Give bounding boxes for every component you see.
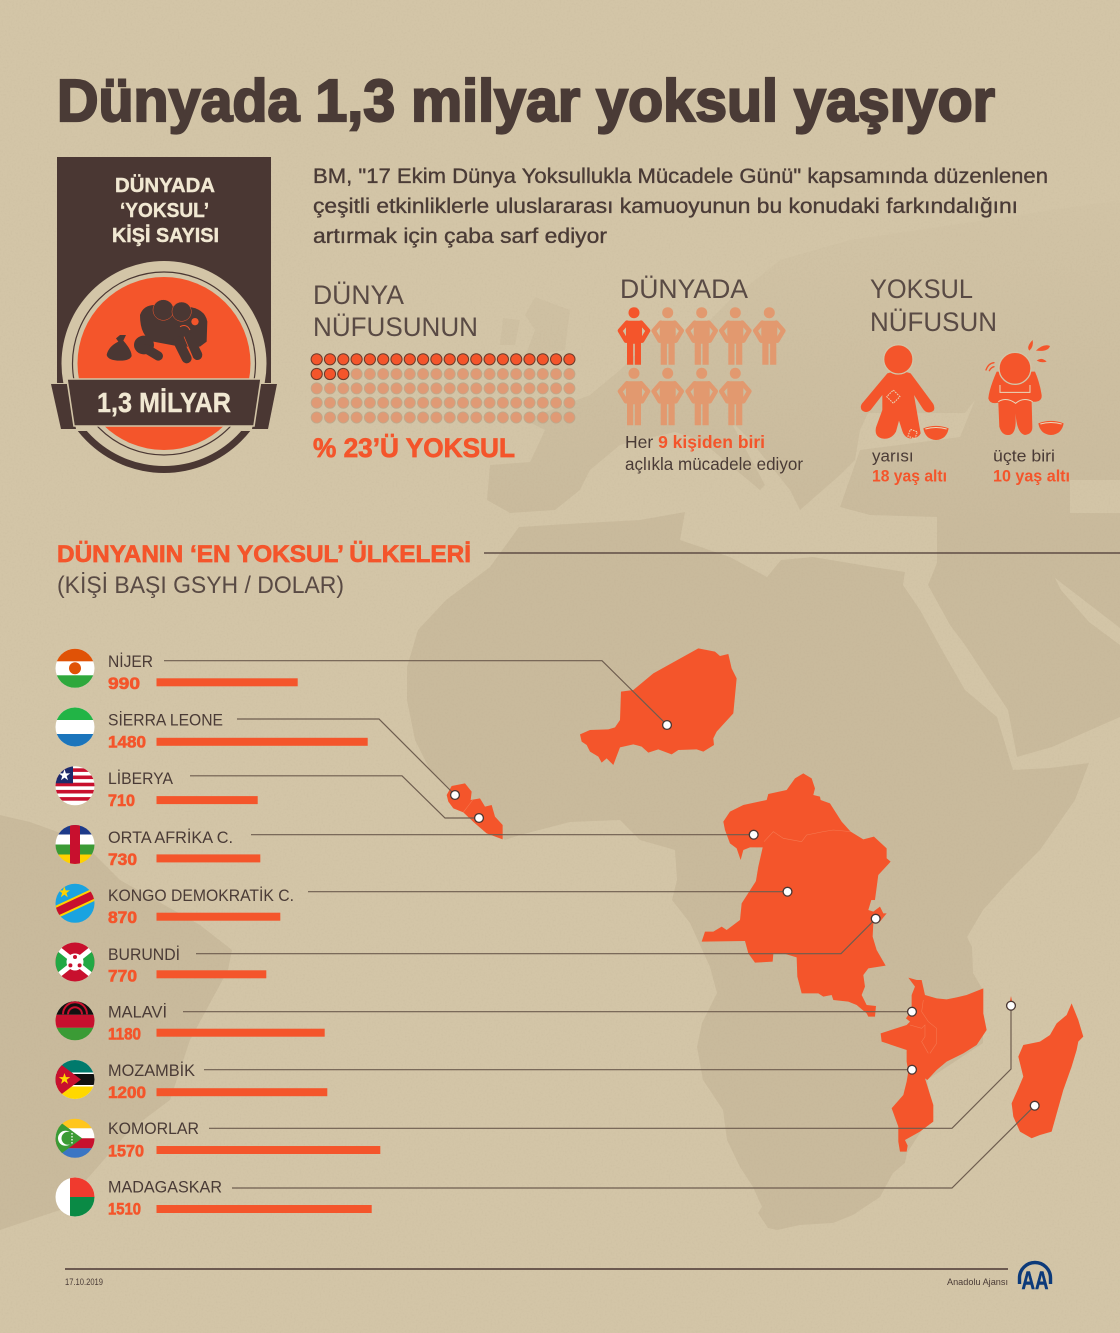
intro paragraph: artırmak için çaba sarf ediyor: [313, 225, 607, 248]
row: Madagaskar: [55, 1177, 372, 1218]
row: Sierra Leone: SİERRA LEONE: [108, 710, 223, 730]
country: Niger: [580, 648, 737, 765]
footer: 17.10.2019: [65, 1277, 103, 1287]
row: Orta Afrika C.: [55, 824, 260, 869]
row: Malavi: 1180: [108, 1024, 141, 1044]
row: Burundi: [55, 942, 266, 986]
ribbon: 1,3 milyar: 1,3 MİLYAR: [97, 387, 231, 418]
country: Madagascar: [1012, 1003, 1083, 1138]
intro paragraph: [313, 165, 1048, 248]
row: Liberya: LİBERYA: [108, 769, 174, 788]
row: Kongo Demokratik C.: 870: [108, 908, 137, 927]
title: Dünyada 1,3 milyar yoksul yaşıyor: [57, 68, 995, 134]
country: Malawi and Mozambique: [881, 978, 987, 1152]
footer: Anadolu Ajansı: [947, 1277, 1008, 1288]
row: Nijer: NİJER: [108, 652, 153, 671]
row: Mozambik: MOZAMBİK: [108, 1061, 196, 1080]
icon: child with patches and bowl: [861, 345, 949, 440]
row: Madagaskar: MADAGASKAR: [108, 1178, 222, 1197]
flag: Burundi: [55, 942, 95, 982]
heading: yoksul nüfusun: NÜFUSUN: [870, 307, 997, 337]
country: Central African Republic: [723, 773, 851, 860]
badge heading: ‘YOKSUL’: [120, 200, 209, 222]
flag: Mozambique: [55, 1060, 95, 1100]
row: Burundi: 770: [108, 966, 137, 986]
row: Nijer: 990: [108, 674, 140, 693]
heading: dünya nüfusunun: [313, 280, 478, 342]
icon: Anadolu Agency logo: AA: [1022, 1267, 1048, 1295]
panel: poor population by age: [861, 274, 1070, 486]
row: Malavi: MALAVİ: [108, 1002, 167, 1022]
caption: hunger: [625, 432, 803, 474]
icon: crouching family with bundle: [107, 300, 207, 361]
row: Liberya: 710: [108, 791, 135, 810]
heading: yoksul nüfusun: [870, 274, 997, 337]
flag: Comoros: [55, 1118, 95, 1158]
row: Mozambik: 1200: [108, 1083, 146, 1102]
caption: third under 10: [993, 446, 1070, 486]
row: Sierra Leone: 1480: [108, 732, 146, 752]
footer: [65, 1262, 1050, 1295]
badge heading: KİŞİ SAYISI: [112, 224, 219, 247]
row: Mozambik: [55, 1060, 327, 1102]
section heading: poorest countries: (KİŞİ BAŞI GSYH / DOLAR): [57, 572, 344, 599]
heading: dünya nüfusunun: DÜNYA: [313, 280, 404, 310]
flag: Niger: [55, 648, 95, 688]
flag: Malawi: [55, 1001, 95, 1041]
flag: DR Congo: [56, 884, 94, 923]
flag: Central African Republic: [55, 824, 95, 864]
map: highlighted countries: [447, 648, 1083, 1152]
panel: world population share: [311, 280, 575, 463]
intro paragraph: çeşitli etkinliklerle uluslararası kamuoyunun bu konudaki farkındalığını: [313, 195, 1018, 218]
heading: dünya nüfusunun: NÜFUSUNUN: [313, 312, 478, 342]
row: Madagaskar: 1510: [108, 1200, 141, 1218]
row: Kongo Demokratik C.: KONGO DEMOKRATİK C.: [108, 886, 294, 905]
flag: Madagascar: [55, 1177, 95, 1217]
row: Burundi: BURUNDİ: [108, 945, 180, 964]
badge heading: DÜNYADA: [115, 174, 215, 197]
row: Orta Afrika C.: 730: [108, 850, 137, 869]
badge heading: [112, 174, 219, 247]
icon: sitting child with tears and bowl: [986, 340, 1064, 435]
country: Sierra Leone and Liberia: [447, 783, 503, 839]
row: Malavi: [55, 1001, 325, 1044]
row: Komorlar: KOMORLAR: [108, 1119, 199, 1138]
stat: 23 percent poor: % 23’Ü YOKSUL: [313, 433, 515, 463]
ribbon: 1,3 milyar: [51, 379, 277, 429]
row: Orta Afrika C.: ORTA AFRİKA C.: [108, 828, 233, 847]
row: Komorlar: [55, 1118, 380, 1160]
caption: hunger: açlıkla mücadele ediyor: [625, 454, 803, 474]
row: Liberya: [55, 766, 258, 810]
country: Comoros: [1010, 996, 1012, 1001]
row: Nijer: [55, 648, 298, 693]
caption: half under 18: [872, 446, 947, 486]
flag: Sierra Leone: [55, 707, 95, 747]
row: Kongo Demokratik C.: [56, 884, 293, 924]
icon: Anadolu Agency logo: [1020, 1262, 1050, 1295]
section heading: poorest countries: [57, 541, 1120, 599]
row: Sierra Leone: [55, 707, 368, 752]
pictogram: nine people: [620, 307, 783, 425]
flag: Liberia: [55, 766, 95, 806]
caption: third under 10: 10 yaş altı: [993, 466, 1070, 486]
panel: hunger 1 in 9: [620, 274, 803, 474]
caption: hunger: Her 9 kişiden biri: [625, 432, 765, 452]
intro paragraph: BM, "17 Ekim Dünya Yoksullukla Mücadele Günü" kapsamında düzenlenen: [313, 165, 1048, 188]
caption: half under 18: yarısı: [872, 446, 914, 466]
country: DR Congo and Burundi: [702, 830, 891, 1017]
caption: half under 18: 18 yaş altı: [872, 466, 947, 486]
caption: third under 10: üçte biri: [993, 446, 1055, 466]
heading: dünyada: DÜNYADA: [620, 274, 748, 304]
panel: global poor count badge: [51, 157, 277, 473]
row: Komorlar: 1570: [108, 1142, 144, 1160]
heading: yoksul nüfusun: YOKSUL: [870, 274, 973, 304]
section heading: poorest countries: DÜNYANIN ‘EN YOKSUL’ ÜLKELERİ: [57, 541, 471, 568]
connector lines and map pins: [164, 661, 1039, 1188]
dot matrix: 23 of 100: [311, 354, 575, 423]
